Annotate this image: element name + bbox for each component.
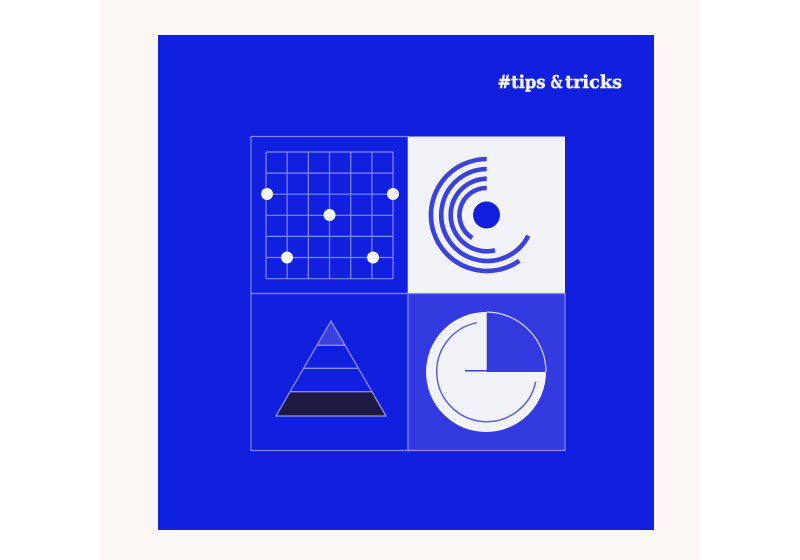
title: & bbox=[550, 72, 562, 93]
panel: pie chart bbox=[408, 294, 565, 450]
title: tricks bbox=[565, 72, 622, 93]
centre dot bbox=[473, 202, 500, 228]
title: #tips bbox=[498, 72, 546, 93]
pyramid bottom tier bbox=[276, 392, 386, 416]
scatter points bbox=[261, 188, 399, 264]
panel: radial arcs chart bbox=[408, 136, 565, 294]
cream page background bbox=[101, 0, 699, 560]
pie radius line bbox=[465, 370, 487, 372]
title bbox=[498, 72, 622, 93]
blue poster panel bbox=[158, 35, 654, 530]
panel: grid scatter chart bbox=[251, 136, 408, 294]
panel: pyramid chart bbox=[251, 294, 408, 450]
pyramid top tier bbox=[317, 321, 345, 345]
pie quarter outline bbox=[487, 312, 546, 372]
concentric arcs bbox=[431, 159, 528, 271]
pyramid outline bbox=[276, 321, 386, 416]
pie three-quarter disc bbox=[426, 312, 546, 432]
pie inner arc bbox=[437, 323, 536, 422]
